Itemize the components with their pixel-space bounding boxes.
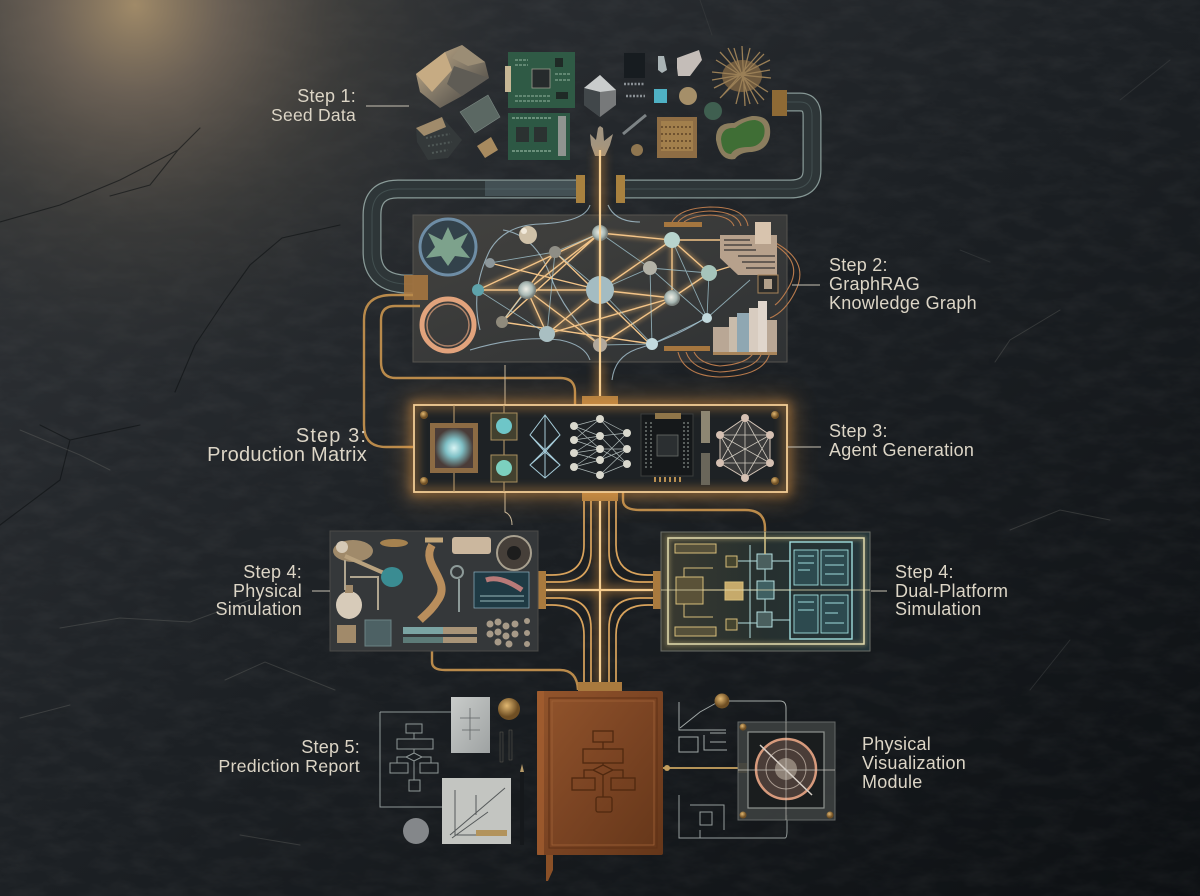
physical visualization module label: Module: [862, 772, 923, 792]
glowing graph edges: [478, 233, 709, 345]
brass link from book: [663, 763, 747, 773]
spindle apparatus: [333, 539, 408, 580]
white neural network: [570, 415, 631, 479]
brass tube clamp: [772, 90, 787, 116]
green lens: [704, 102, 722, 120]
moss rock: [716, 116, 770, 159]
upper chart sketch: [679, 702, 727, 752]
small dark chip: [624, 53, 645, 96]
flowchart sketch: [380, 712, 451, 807]
copper pipes between panels: [364, 295, 765, 690]
connector strips: [404, 222, 710, 351]
grey paper: [451, 697, 490, 753]
step 3 agent generation label: Agent Generation: [829, 440, 974, 460]
copper wire loops: [672, 207, 800, 377]
cyan tile: [654, 89, 667, 103]
step 4 physical simulation label: Step 4:: [243, 562, 302, 582]
straw tuft: [712, 46, 771, 106]
step 1 label: Step 1:: [297, 86, 356, 106]
pale crystal: [677, 50, 702, 76]
circuit board one: [505, 52, 575, 108]
pens: [500, 730, 524, 845]
visualization module: [663, 694, 835, 838]
step 4 physical simulation label: Physical: [233, 581, 302, 601]
step 2 label: [792, 255, 977, 313]
dual platform simulation panel: [661, 532, 870, 651]
copper coil: [422, 299, 474, 351]
blue curves: [470, 205, 705, 380]
step 4 dual platform label: Step 4:: [895, 562, 954, 582]
step 1 label: [271, 86, 409, 125]
crystal nodes: [472, 225, 717, 352]
teal coil: [381, 567, 403, 587]
round lens: [497, 536, 531, 570]
dark processor board: [641, 413, 693, 482]
physical visualization module label: Visualization: [862, 753, 966, 773]
glass tube from seed data around to knowledge graph: [372, 102, 812, 284]
bolts: [420, 411, 779, 485]
hexagon crystal: [584, 75, 616, 117]
step 3 production matrix label: Step 3:: [296, 425, 367, 447]
clear shard: [658, 56, 667, 73]
step 5 label: Step 5:: [301, 737, 360, 757]
building bars: [713, 301, 777, 355]
tube clamps: [576, 175, 625, 203]
crystal hand splitter: [590, 126, 613, 156]
step 3 production matrix label: [207, 425, 367, 466]
central gold trunk: [599, 150, 601, 685]
knowledge graph panel: [404, 205, 800, 380]
small square chip: [758, 275, 778, 293]
bead square: [657, 117, 697, 158]
blue neural lattice: [530, 415, 560, 478]
step 4 dual platform label: Simulation: [895, 599, 982, 619]
gold pipes: [364, 150, 765, 692]
step 3 production matrix label: Production Matrix: [207, 444, 367, 466]
glass lens square: [738, 722, 835, 820]
cylindrical bars: [403, 627, 477, 643]
seed data objects: [416, 45, 787, 160]
step 4 dual platform label: Dual-Platform: [895, 581, 1008, 601]
succulent in dish: [420, 219, 476, 275]
data screen: [474, 572, 529, 608]
hexagon mesh: [716, 414, 774, 482]
step 4 dual platform label: [871, 562, 1008, 619]
left report documents: [380, 697, 524, 845]
capacitors: [701, 411, 710, 485]
circuit board two: [508, 113, 570, 160]
step 3 agent generation label: [788, 421, 974, 460]
helix column: [420, 540, 443, 620]
dark rock: [416, 117, 462, 160]
main glowing chip: [430, 423, 478, 473]
blue graph edges: [478, 233, 750, 345]
magnifier: [451, 566, 463, 612]
steel knob: [403, 818, 429, 844]
small glowing chips: [491, 413, 517, 482]
lower circuit sketch: [679, 795, 787, 838]
step 5 label: [218, 737, 360, 776]
pebbles: [486, 618, 530, 648]
step 4 physical simulation label: Simulation: [215, 599, 302, 619]
graph paper: [442, 778, 511, 844]
step 2 label: Step 2:: [829, 255, 888, 275]
coil cylinder: [452, 537, 491, 554]
tan pebble: [679, 87, 697, 105]
embossed flowchart: [572, 731, 635, 812]
central schematic: [738, 545, 790, 638]
glass orb: [519, 226, 537, 244]
hatched block: [720, 222, 777, 275]
small parts: [623, 115, 646, 156]
thin links: [505, 365, 512, 525]
large rock: [416, 45, 489, 108]
lab flasks: [336, 560, 391, 646]
step 3 agent generation label: Step 3:: [829, 421, 888, 441]
step 2 label: Knowledge Graph: [829, 293, 977, 313]
step 4 physical simulation label: [215, 562, 330, 619]
small stone: [477, 137, 498, 158]
brass knob: [498, 698, 520, 720]
right dashboards: [794, 550, 848, 633]
routing bundle: [538, 492, 661, 688]
brass route line: [714, 694, 786, 722]
agent generation panel: [413, 405, 787, 492]
step 5 label: Prediction Report: [218, 756, 360, 776]
connector ribs: [538, 396, 661, 692]
step 1 label: Seed Data: [271, 105, 356, 125]
gold graph edges: [478, 233, 745, 345]
leather report book: [537, 691, 663, 881]
physical visualization module label: Physical: [862, 734, 931, 754]
step 2 label: GraphRAG: [829, 274, 920, 294]
physical visualization module label: [862, 734, 966, 792]
left schematic: [675, 544, 743, 636]
grey tile: [460, 95, 500, 133]
physical simulation panel: [330, 531, 538, 651]
